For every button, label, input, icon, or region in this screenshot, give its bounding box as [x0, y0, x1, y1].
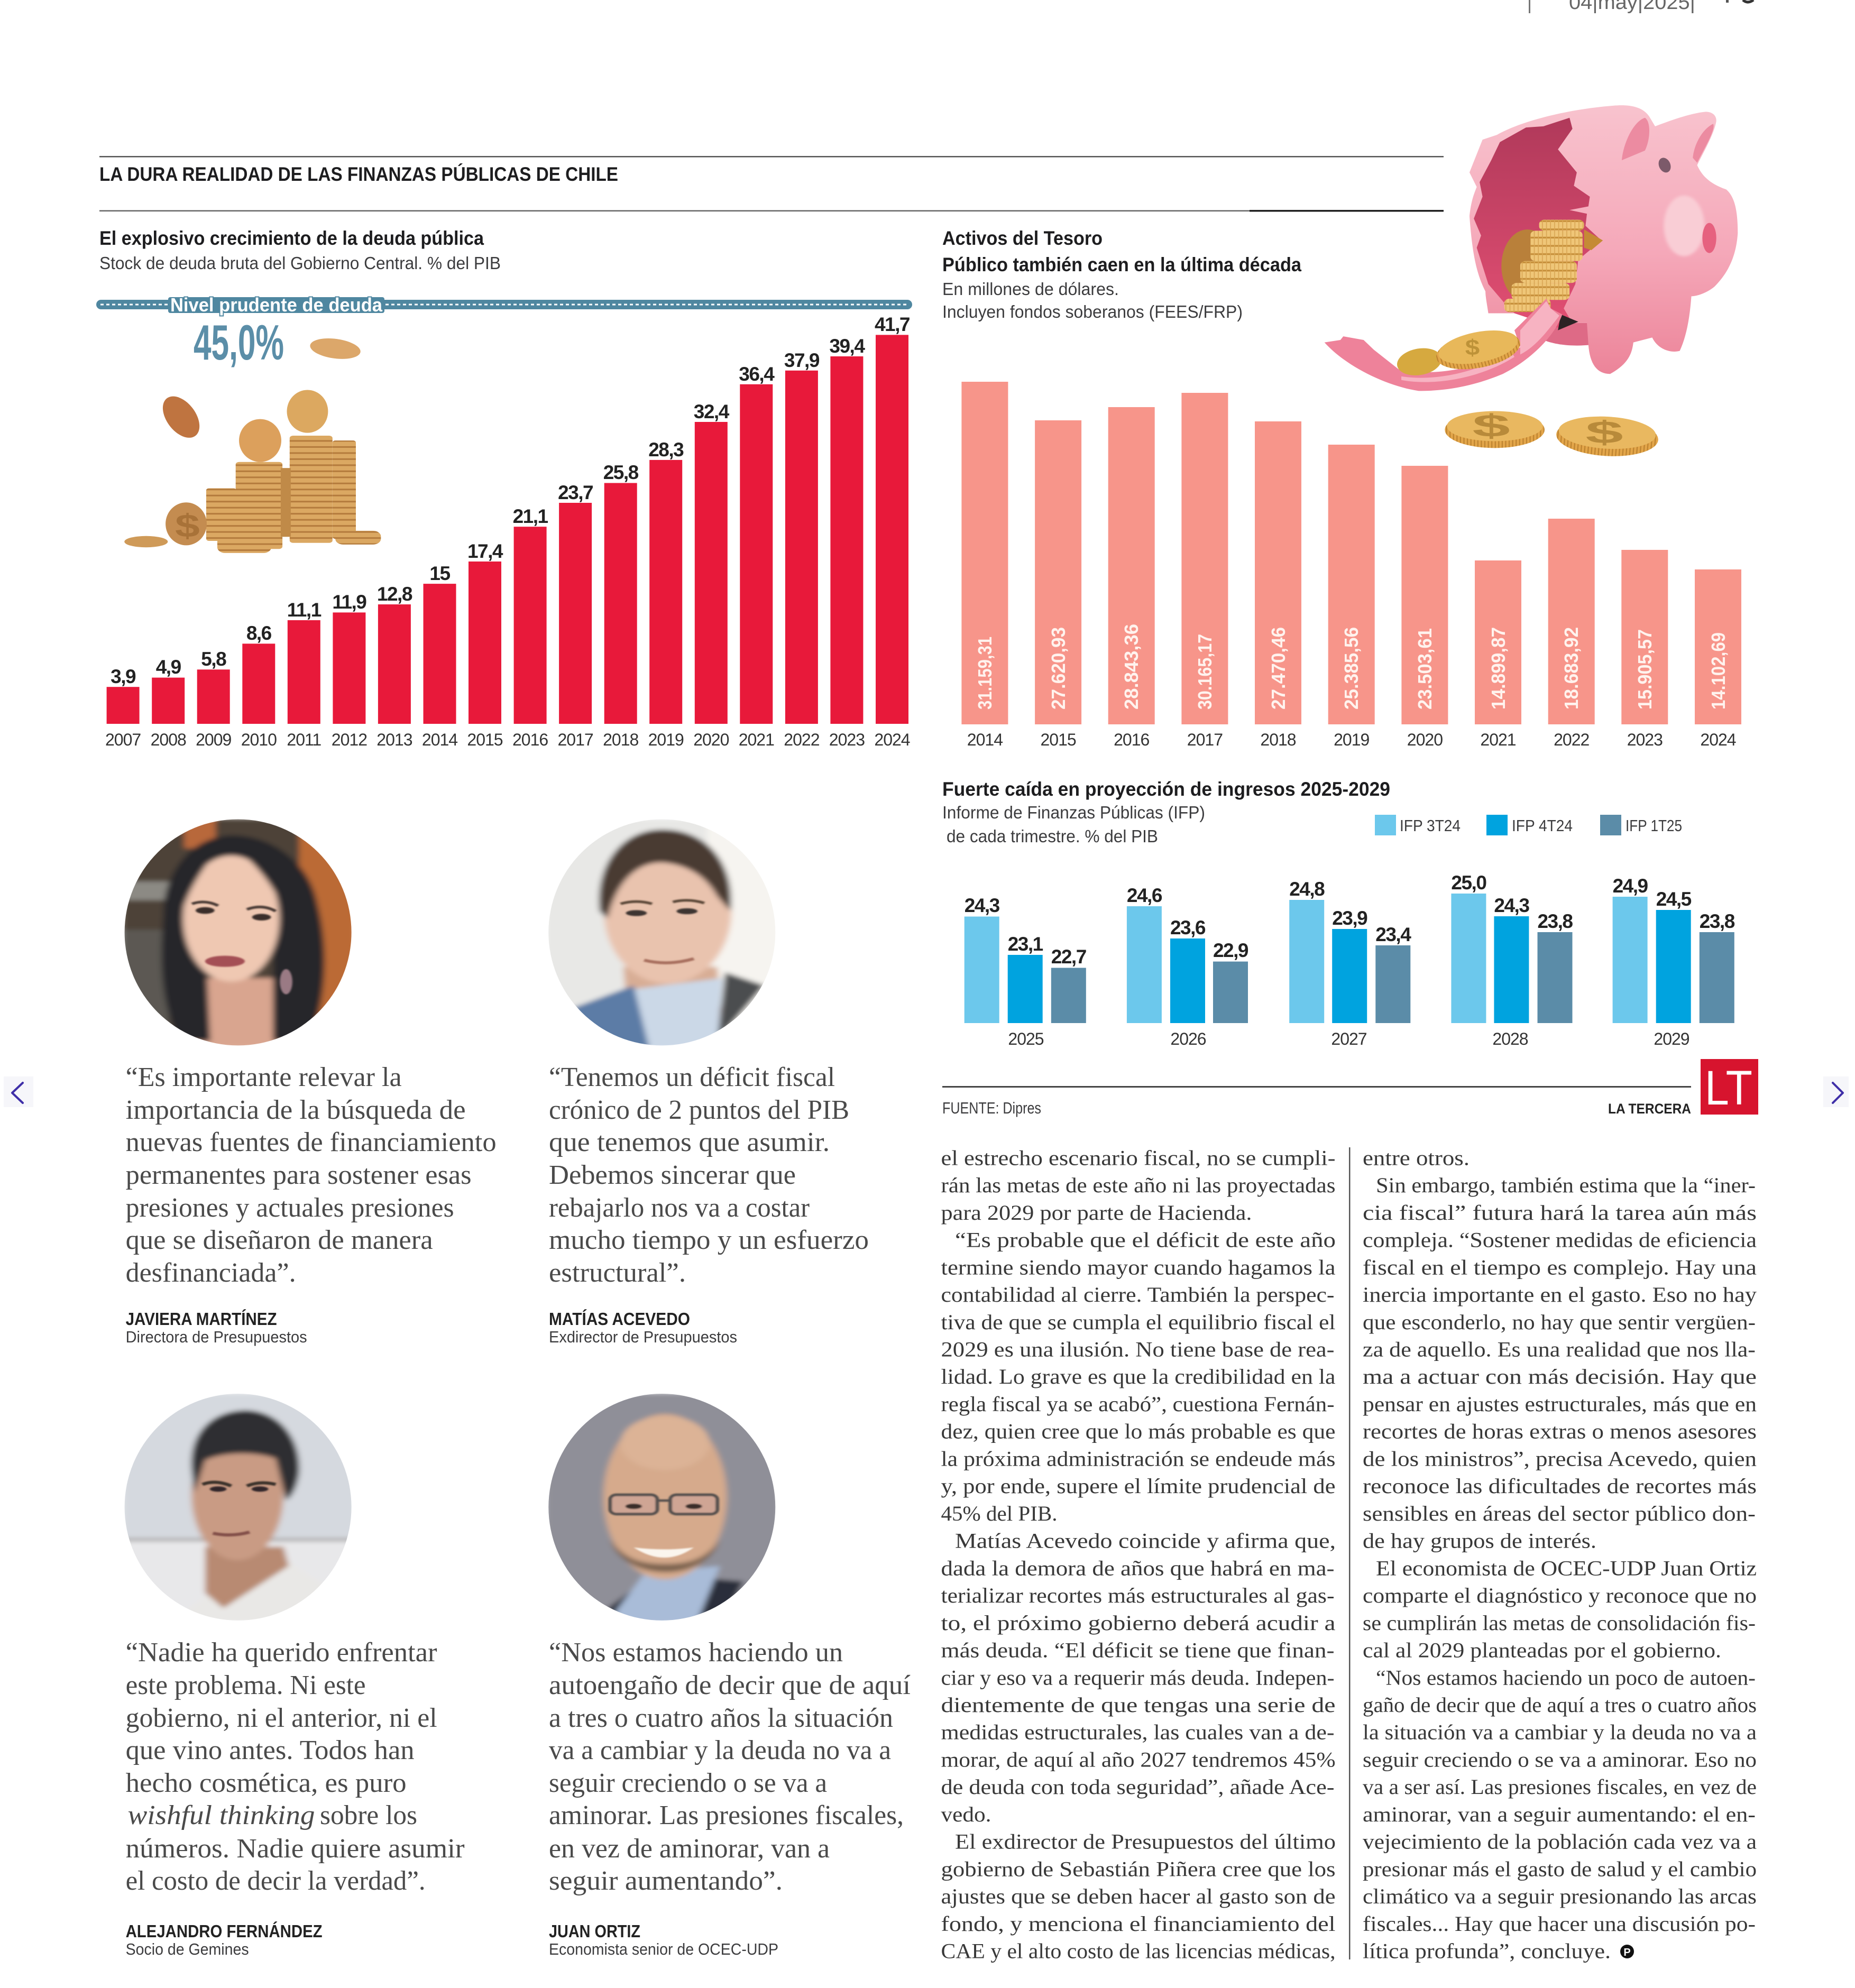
- legend: IFP 1T25: [1626, 816, 1682, 835]
- bar chart: treasury assets by year: 27.470,46: [1268, 627, 1289, 710]
- bar chart: treasury assets by year: 2014: [967, 730, 1003, 749]
- bar chart: treasury assets by year: 15.905,57: [1634, 629, 1656, 710]
- bar chart: debt by year: 11,1: [287, 599, 322, 621]
- article text column 1: El exdirector de Presupuestos del último: [955, 1830, 1336, 1854]
- bar chart: debt by year: 15: [429, 563, 450, 584]
- quote text: [549, 1637, 911, 1896]
- grouped bar chart: projections: 24,8: [1289, 878, 1325, 900]
- attribution: ALEJANDRO FERNÁNDEZ: [126, 1921, 323, 1941]
- article text column 1: termine siendo mayor cuando hagamos la: [941, 1255, 1336, 1279]
- bar chart: debt by year: 2011: [287, 730, 321, 749]
- coins inside piggy: [1501, 220, 1603, 312]
- bar chart: debt by year: 2010: [241, 730, 277, 749]
- portrait: Juan Ortiz: [545, 1393, 780, 1624]
- bar chart: treasury assets by year: 31.159,31: [974, 637, 996, 710]
- article text column 2: de los ministros”, precisa Acevedo, quien: [1363, 1447, 1757, 1470]
- attribution: MATÍAS ACEVEDO: [549, 1309, 690, 1329]
- bar chart: debt by year: 2014: [422, 730, 457, 749]
- article text column 1: más deuda. “El déficit se tiene que finan-: [941, 1638, 1335, 1662]
- article text column 2: vejecimiento de la población cada vez va a: [1363, 1830, 1757, 1854]
- chart heading: Informe de Finanzas Públicas (IFP): [942, 803, 1205, 822]
- credit: La Tercera: LA TERCERA: [1608, 1101, 1691, 1117]
- attribution: Directora de Presupuestos: [126, 1328, 307, 1346]
- article text column 2: que esconderlo, no hay que sentir vergüen-: [1363, 1310, 1756, 1334]
- article text column 2: [1363, 1146, 1757, 1963]
- article text column 1: dientemente de que tengas una serie de: [941, 1693, 1336, 1717]
- quote text: que se diseñaron de manera: [126, 1225, 433, 1255]
- article text column 2: fiscales... Hay que hacer una discusión po-: [1363, 1912, 1756, 1936]
- coins on shell: [1393, 325, 1525, 380]
- quote text: que vino antes. Todos han: [126, 1735, 415, 1765]
- bar chart: debt by year: 4,9: [156, 656, 181, 678]
- article text column 2: ma a actuar con más decisión. Hay que: [1363, 1365, 1757, 1388]
- article text column 1: “Es probable que el déficit de este año: [955, 1228, 1336, 1252]
- article text column 1: ajustes que se deben hacer al gasto son de: [941, 1884, 1336, 1908]
- bar chart: debt by year: 2015: [467, 730, 503, 749]
- quote text: desfinanciada”.: [126, 1258, 296, 1288]
- grouped bar chart: projections: 2027: [1331, 1029, 1367, 1048]
- loose coin left: $: [1472, 408, 1510, 443]
- article text column 2: entre otros.: [1363, 1146, 1470, 1170]
- article text column 2: sensibles en áreas del sector público don-: [1363, 1502, 1756, 1525]
- bar chart: treasury assets by year: [961, 382, 1741, 749]
- navigation arrow: previous: [4, 1076, 33, 1107]
- article text column 2: comparte el diagnóstico y reconoce que no: [1363, 1584, 1757, 1607]
- bar chart: treasury assets by year: 2015: [1041, 730, 1076, 749]
- bar chart: debt by year: 36,4: [739, 363, 775, 385]
- bar chart: debt by year: 2012: [332, 730, 367, 749]
- article text column 1: fondo, y menciona el financiamiento del: [941, 1912, 1336, 1936]
- quote text: sobre los: [320, 1800, 417, 1830]
- bar chart: debt by year: 2008: [151, 730, 186, 749]
- chart heading: de cada trimestre. % del PIB: [947, 826, 1158, 846]
- bar chart: debt by year: 3,9: [111, 666, 136, 687]
- bar chart: debt by year: [105, 314, 910, 749]
- attribution: Economista senior de OCEC-UDP: [549, 1940, 778, 1958]
- grouped bar chart: projections: 24,5: [1656, 888, 1692, 910]
- bar chart: debt by year: 21,1: [513, 505, 548, 527]
- quote text: que tenemos que asumir.: [549, 1127, 830, 1157]
- panel: treasury assets chart: [942, 227, 1741, 749]
- grouped bar chart: projections: 23,8: [1700, 910, 1735, 932]
- quote text: “Nadie ha querido enfrentar: [126, 1637, 437, 1668]
- bar chart: debt by year: 2009: [196, 730, 231, 749]
- grouped bar chart: projections: 2026: [1170, 1029, 1206, 1048]
- article text column 1: gobierno de Sebastián Piñera cree que los: [941, 1857, 1336, 1881]
- bar chart: debt by year: 2020: [693, 730, 729, 749]
- article text column 2: se cumplirán las metas de consolidación fis-: [1363, 1611, 1756, 1635]
- quote text: [126, 1062, 497, 1288]
- panel: income projection chart: [942, 778, 1735, 1048]
- article text column 2: cia fiscal” futura hará la tarea aún más: [1363, 1201, 1757, 1225]
- quote text: seguir creciendo o se va a: [549, 1768, 827, 1798]
- page date header: [1529, 0, 1753, 14]
- bar chart: treasury assets by year: 23.503,61: [1414, 628, 1436, 710]
- quote text: nuevas fuentes de financiamiento: [126, 1127, 497, 1157]
- bar chart: debt by year: 41,7: [875, 314, 910, 335]
- icon: end of article mark: P: [1623, 1947, 1631, 1958]
- chart heading: Incluyen fondos soberanos (FEES/FRP): [942, 302, 1243, 321]
- article text column 2: reconoce las dificultades de recortes más: [1363, 1474, 1757, 1498]
- quote text: a tres o cuatro años la situación: [549, 1703, 893, 1733]
- coins on shell: $: [1465, 335, 1480, 360]
- logo: LT: LT: [1705, 1061, 1752, 1115]
- grouped bar chart: projections: 23,4: [1375, 924, 1411, 945]
- quote text: autoengaño de decir que de aquí: [549, 1670, 911, 1700]
- bar chart: debt by year: 39,4: [829, 335, 865, 357]
- prudent debt level line: Nivel prudente de deuda: [170, 294, 383, 316]
- bar chart: treasury assets by year: 25.385,56: [1340, 627, 1362, 710]
- grouped bar chart: projections: 23,1: [1008, 933, 1043, 955]
- grouped bar chart: projections: 24,3: [965, 895, 1000, 916]
- bar chart: treasury assets by year: 2019: [1334, 730, 1369, 749]
- quote text: números. Nadie quiere asumir: [126, 1834, 465, 1864]
- quote text: crónico de 2 puntos del PIB: [549, 1095, 849, 1125]
- article text column 2: Sin embargo, también estima que la “iner-: [1376, 1173, 1756, 1197]
- portrait: Matías Acevedo: [545, 818, 780, 1048]
- chart heading: Público también caen en la última década: [942, 254, 1301, 275]
- grouped bar chart: projections: 23,6: [1170, 917, 1206, 938]
- panel: quote Alejandro Fernández: [122, 1393, 465, 1958]
- piggy belly interior: [1540, 323, 1591, 346]
- bar chart: debt by year: 8,6: [246, 622, 272, 644]
- article text column 2: recortes de horas extras o menos asesores: [1363, 1420, 1757, 1443]
- article text column 1: [941, 1146, 1336, 1963]
- bar chart: treasury assets by year: 2021: [1480, 730, 1516, 749]
- bar chart: debt by year: 11,9: [332, 591, 366, 613]
- grouped bar chart: projections: 24,3: [1494, 895, 1529, 916]
- quote text: seguir aumentando”.: [549, 1866, 783, 1896]
- chart heading: El explosivo crecimiento de la deuda pública: [99, 227, 484, 249]
- quote text: mucho tiempo y un esfuerzo: [549, 1225, 869, 1255]
- article text column 2: inercia importante en el gasto. Eso no hay: [1363, 1283, 1757, 1306]
- bar chart: treasury assets by year: 2022: [1554, 730, 1589, 749]
- quote text: rebajarlo nos va a costar: [549, 1193, 810, 1223]
- chart heading: [942, 778, 1390, 846]
- grouped bar chart: projections: 25,0: [1451, 872, 1486, 894]
- piggy body: [1470, 105, 1738, 374]
- article text column 2: va a ser así. Las presiones fiscales, en vez de: [1363, 1775, 1757, 1799]
- quote text: aminorar. Las presiones fiscales,: [549, 1800, 904, 1830]
- bar chart: debt by year: 2022: [784, 730, 820, 749]
- legend: IFP 4T24: [1512, 816, 1573, 835]
- bar chart: treasury assets by year: 27.620,93: [1048, 627, 1069, 710]
- attribution: [549, 1921, 778, 1958]
- panel: quote Javiera Martínez: [122, 818, 497, 1346]
- article text column 1: vedo.: [941, 1802, 991, 1826]
- quote text: “Tenemos un déficit fiscal: [549, 1062, 835, 1092]
- prudent level value: 45,0%: [194, 315, 284, 370]
- grouped bar chart: projections: 22,7: [1051, 946, 1086, 968]
- quote text: gobierno, ni el anterior, ni el: [126, 1703, 437, 1733]
- article text column 1: tiva de que se cumpla el equilibrio fiscal el: [941, 1310, 1336, 1334]
- panel: quote Juan Ortiz: [545, 1393, 911, 1958]
- article text column 1: el estrecho escenario fiscal, no se cumpli-: [941, 1146, 1336, 1170]
- article text column 1: medidas estructurales, las cuales van a de-: [941, 1720, 1335, 1744]
- attribution: JUAN ORTIZ: [549, 1921, 640, 1941]
- bar chart: debt by year: 2007: [105, 730, 141, 749]
- quote text: va a cambiar y la deuda no va a: [549, 1735, 891, 1765]
- bar chart: treasury assets by year: 2020: [1407, 730, 1443, 749]
- bar chart: debt by year: 2013: [376, 730, 412, 749]
- legend: IFP 3T24: [1400, 816, 1461, 835]
- hole in piggy shell: [1474, 118, 1601, 328]
- attribution: JAVIERA MARTÍNEZ: [126, 1309, 277, 1329]
- bar chart: debt by year: 2024: [874, 730, 910, 749]
- article text column 2: compleja. “Sostener medidas de eficiencia: [1363, 1228, 1757, 1252]
- article text column 1: dada la demora de años que habrá en ma-: [941, 1556, 1335, 1580]
- article text column 2: climático va a seguir presionando las arcas: [1363, 1884, 1757, 1908]
- article text column 2: la situación va a cambiar y la deuda no va a: [1363, 1720, 1757, 1744]
- article text column 1: 2029 es una ilusión. No tiene base de rea-: [941, 1338, 1335, 1361]
- article text column 1: terializar recortes más estructurales al gas-: [941, 1584, 1335, 1607]
- source note: FUENTE: Dipres: [942, 1099, 1041, 1117]
- bar chart: debt by year: 32,4: [694, 401, 730, 422]
- quote text: wishful thinking: [128, 1800, 315, 1830]
- loose coin right: $: [1585, 415, 1623, 450]
- bar chart: debt by year: 25,8: [603, 462, 639, 483]
- grouped bar chart: projections: 2025: [1008, 1029, 1044, 1048]
- chart heading: En millones de dólares.: [942, 279, 1119, 299]
- article text column 2: presionar más el gasto de salud y el cambio: [1363, 1857, 1757, 1881]
- quote text: presiones y actuales presiones: [126, 1193, 454, 1223]
- quote text: permanentes para sostener esas: [126, 1160, 472, 1190]
- portrait: Javiera Martínez: [122, 818, 356, 1048]
- bar chart: debt by year: 17,4: [467, 540, 503, 562]
- grouped bar chart: projections: [965, 872, 1735, 1048]
- loose coin right: [1555, 414, 1660, 459]
- chart heading: Fuerte caída en proyección de ingresos 2025-2029: [942, 778, 1390, 800]
- grouped bar chart: projections: 24,9: [1613, 875, 1648, 897]
- bar chart: treasury assets by year: 14.899,87: [1487, 627, 1509, 710]
- article text column 1: dez, quien cree que lo más probable es que: [941, 1420, 1336, 1443]
- bar chart: treasury assets by year: 18.683,92: [1560, 627, 1582, 710]
- article text column 1: CAE y el alto costo de las licencias médicas,: [941, 1939, 1336, 1963]
- bar chart: debt by year: 37,9: [784, 349, 820, 371]
- article text column 2: seguir creciendo o se va a aminorar. Eso no: [1363, 1748, 1757, 1771]
- article text column 2: fiscal en el tiempo es complejo. Hay una: [1363, 1255, 1757, 1279]
- quote text: estructural”.: [549, 1258, 686, 1288]
- article text column 1: lidad. Lo grave es que la credibilidad en la: [941, 1365, 1336, 1388]
- bar chart: treasury assets by year: 30.165,17: [1194, 634, 1216, 710]
- quote text: “Es importante relevar la: [126, 1062, 402, 1092]
- grouped bar chart: projections: 24,6: [1127, 885, 1162, 906]
- bar chart: treasury assets by year: 2016: [1114, 730, 1149, 749]
- bar chart: debt by year: 28,3: [648, 439, 684, 461]
- article text column 2: gaño de decir que de aquí a tres o cuatro años: [1363, 1693, 1757, 1717]
- quote text: Debemos sincerar que: [549, 1160, 796, 1190]
- article text column 1: regla fiscal ya se acabó”, cuestiona Fernán-: [941, 1392, 1335, 1416]
- article text column 1: de deuda con toda seguridad”, añade Ace-: [941, 1775, 1335, 1799]
- icon: broken piggy bank with coins: [1325, 105, 1738, 459]
- article text column 1: to, el próximo gobierno deberá acudir a: [941, 1611, 1336, 1635]
- article text column 1: y, por ende, supere el límite prudencial de: [941, 1474, 1336, 1498]
- article text column 2: pensar en ajustes estructurales, más que en: [1363, 1392, 1757, 1416]
- article text column 2: El economista de OCEC-UDP Juan Ortiz: [1376, 1556, 1757, 1580]
- quote text: este problema. Ni este: [126, 1670, 366, 1700]
- article text column 2: “Nos estamos haciendo un poco de autoen-: [1376, 1665, 1756, 1689]
- prudent debt level line: [96, 294, 912, 316]
- article text column 1: ciar y eso va a requerir más deuda. Indepen-: [941, 1665, 1335, 1689]
- article text column 1: la próxima administración se endeude más: [941, 1447, 1336, 1470]
- chart heading: Activos del Tesoro: [942, 227, 1103, 249]
- quote text: [549, 1062, 869, 1288]
- quote text: el costo de decir la verdad”.: [126, 1866, 426, 1896]
- quote text: en vez de aminorar, van a: [549, 1834, 830, 1864]
- panel: quote Matías Acevedo: [545, 818, 869, 1346]
- attribution: Exdirector de Presupuestos: [549, 1328, 737, 1346]
- bar chart: debt by year: 2019: [648, 730, 684, 749]
- legend: [1375, 815, 1682, 835]
- broken shell: [1325, 299, 1562, 391]
- article text column 1: morar, de aquí al año 2027 tendremos 45%: [941, 1748, 1336, 1771]
- icon: coin stacks: $: [175, 508, 200, 544]
- quote text: importancia de la búsqueda de: [126, 1095, 466, 1125]
- bar chart: debt by year: 2016: [512, 730, 548, 749]
- icon: coin stacks: [124, 335, 381, 553]
- chart heading: [99, 227, 501, 273]
- attribution: [549, 1309, 737, 1346]
- bar chart: treasury assets by year: 2023: [1627, 730, 1663, 749]
- article text column 1: 45% del PIB.: [941, 1502, 1058, 1525]
- chart heading: Stock de deuda bruta del Gobierno Central. % del PIB: [99, 253, 501, 273]
- article text column 1: para 2029 por parte de Hacienda.: [941, 1201, 1252, 1225]
- bar chart: treasury assets by year: 2018: [1260, 730, 1296, 749]
- bar chart: treasury assets by year: 2017: [1187, 730, 1223, 749]
- bar chart: debt by year: 12,8: [377, 583, 412, 605]
- quote text: [126, 1637, 465, 1896]
- article text column 1: rán las metas de este año ni las proyectadas: [941, 1173, 1336, 1197]
- article text column 2: cal al 2029 planteadas por el gobierno.: [1363, 1638, 1721, 1662]
- icon: end of article mark: [1620, 1945, 1634, 1958]
- bar chart: debt by year: 2017: [558, 730, 593, 749]
- bar chart: debt by year: 2023: [829, 730, 865, 749]
- bar chart: debt by year: 5,8: [201, 648, 226, 670]
- article text column 2: lítica profunda”, concluye.: [1363, 1939, 1611, 1963]
- portrait: Alejandro Fernández: [122, 1393, 356, 1624]
- grouped bar chart: projections: 23,9: [1332, 907, 1367, 929]
- article text column 1: contabilidad al cierre. También la perspec-: [941, 1283, 1335, 1306]
- grouped bar chart: projections: 2028: [1492, 1029, 1528, 1048]
- chart heading: [942, 227, 1301, 321]
- bar chart: debt by year: 23,7: [558, 482, 593, 503]
- article text column 2: de hay grupos de interés.: [1363, 1529, 1596, 1553]
- attribution: [126, 1921, 323, 1958]
- quote text: “Nos estamos haciendo un: [549, 1637, 843, 1668]
- bar chart: treasury assets by year: 28.843,36: [1121, 624, 1142, 710]
- bar chart: treasury assets by year: 2024: [1700, 730, 1736, 749]
- ears: [1622, 118, 1649, 160]
- grouped bar chart: projections: 23,8: [1537, 910, 1573, 932]
- article text column 1: Matías Acevedo coincide y afirma que,: [955, 1529, 1336, 1553]
- bar chart: debt by year: 2018: [603, 730, 638, 749]
- article text column 2: za de aquello. Es una realidad que nos lla-: [1363, 1338, 1756, 1361]
- bar chart: debt by year: 2021: [739, 730, 774, 749]
- attribution: Socio de Gemines: [126, 1940, 249, 1958]
- panel: public debt growth chart: [96, 227, 912, 749]
- loose coin left: [1445, 408, 1545, 448]
- navigation arrow: next: [1823, 1076, 1849, 1107]
- grouped bar chart: projections: 2029: [1654, 1029, 1689, 1048]
- bar chart: treasury assets by year: 14.102,69: [1707, 632, 1729, 710]
- main heading: LA DURA REALIDAD DE LAS FINANZAS PÚBLICAS DE CHILE: [99, 163, 618, 185]
- article text column 2: aminorar, van a seguir aumentando: el en-: [1363, 1802, 1756, 1826]
- attribution: [126, 1309, 307, 1346]
- snout highlight: [1664, 196, 1704, 256]
- quote text: hecho cosmética, es puro: [126, 1768, 407, 1798]
- grouped bar chart: projections: 22,9: [1213, 940, 1248, 961]
